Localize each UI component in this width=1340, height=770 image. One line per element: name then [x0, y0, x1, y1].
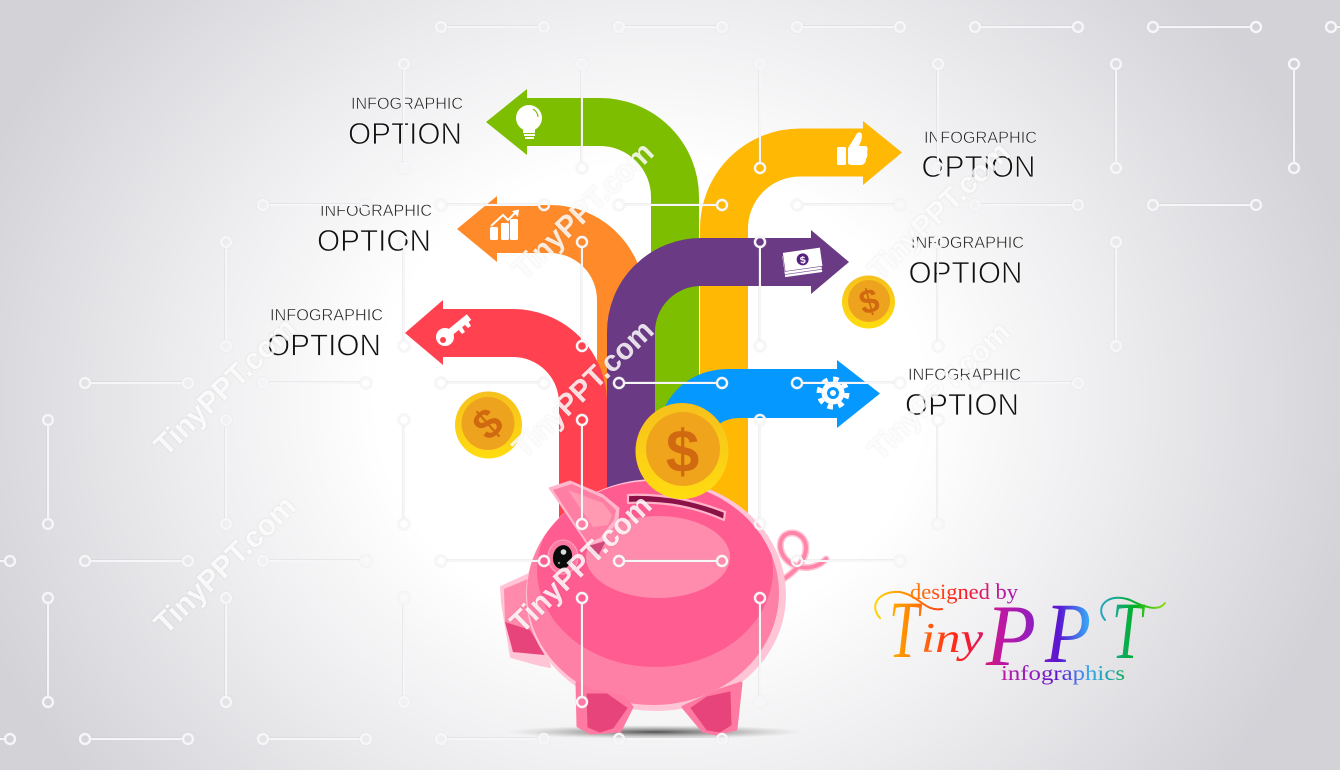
- coin: large dropping into slot: $: [666, 418, 699, 485]
- label: option middle left: OPTION: [317, 223, 431, 258]
- icon: money stack: $: [799, 255, 807, 267]
- logo flourish: left T swash: [875, 592, 942, 618]
- label: option top right: [922, 129, 1037, 184]
- logo wordmark: iny: iny: [921, 616, 983, 662]
- label: option middle right: [908, 234, 1024, 290]
- arrow: blue: [662, 360, 880, 450]
- logo line: infographics: infographics: [1001, 661, 1125, 685]
- pig left leg: [577, 683, 632, 733]
- watermarks: TinyPPT.com: [506, 314, 661, 465]
- icon: growth chart: [490, 210, 519, 240]
- logo: designed by TinyPPT infographics: [875, 579, 1165, 685]
- ground shadow: [505, 725, 805, 739]
- label: option lower right: OPTION: [905, 387, 1019, 422]
- pig ear: [549, 481, 619, 558]
- watermarks: TinyPPT.com: [862, 316, 1017, 467]
- pig body: [526, 473, 786, 711]
- label: option lower right: INFOGRAPHIC: [908, 366, 1021, 384]
- label: option top left: [348, 95, 463, 151]
- watermarks: [148, 136, 1017, 641]
- piggy bank: [501, 473, 826, 734]
- label: option top left: INFOGRAPHIC: [351, 95, 463, 113]
- label: option middle left: [317, 202, 432, 258]
- arrow: purple: [631, 230, 849, 500]
- logo wordmark: first P: P: [985, 588, 1036, 685]
- label: option top right: INFOGRAPHIC: [924, 129, 1037, 147]
- coin: left: $: [463, 398, 512, 449]
- logo wordmark: second P: P: [1044, 585, 1091, 681]
- coin: large dropping into slot: [636, 403, 728, 499]
- watermarks: TinyPPT.com: [862, 136, 1017, 287]
- arrow: orange: [457, 196, 621, 440]
- icon: thumbs up: [837, 132, 868, 165]
- logo line: designed by: designed by: [910, 579, 1018, 604]
- label: option middle left: INFOGRAPHIC: [320, 202, 432, 220]
- pig right leg: [683, 683, 741, 734]
- label: option top left: OPTION: [348, 116, 462, 151]
- pig snout: [501, 574, 550, 667]
- label: option lower left: INFOGRAPHIC: [270, 306, 383, 324]
- pig coin slot: [628, 495, 725, 520]
- watermarks: TinyPPT.com: [506, 136, 661, 287]
- watermarks: TinyPPT.com: [504, 489, 659, 640]
- pig tail: [780, 533, 826, 580]
- watermarks: TinyPPT.com: [148, 490, 303, 641]
- icon: key: [436, 317, 471, 346]
- label: option middle right: OPTION: [908, 255, 1022, 290]
- icon: gear: [819, 379, 847, 407]
- coin: right: $: [855, 281, 883, 323]
- arrow: red: [405, 300, 583, 530]
- icon: money stack: [782, 247, 824, 278]
- coin: right: [842, 276, 895, 328]
- arrow: yellow: [724, 121, 902, 525]
- coin: left: [455, 392, 522, 458]
- logo flourish: right T swash: [1101, 598, 1165, 620]
- arrow: green: [486, 89, 675, 500]
- label: option lower left: [267, 306, 383, 362]
- logo wordmark: last T: T: [1112, 585, 1146, 676]
- label: option middle right: INFOGRAPHIC: [911, 234, 1024, 252]
- label: option lower right: [905, 366, 1021, 422]
- logo wordmark: T: T: [889, 584, 923, 675]
- label: option lower left: OPTION: [267, 328, 381, 362]
- icon: light bulb: [516, 105, 542, 139]
- pig eye: [548, 540, 578, 574]
- watermarks: TinyPPT.com: [148, 312, 303, 463]
- label: option top right: OPTION: [922, 149, 1036, 184]
